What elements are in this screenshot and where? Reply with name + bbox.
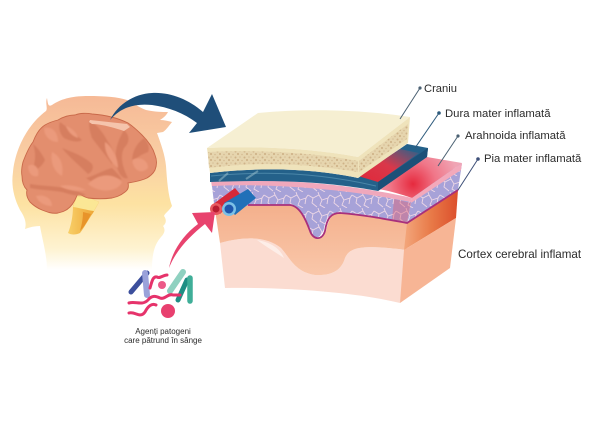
- brain stem: [68, 193, 99, 234]
- purple side: [407, 163, 462, 223]
- label: Arahnoida: Arahnoida inflamată: [465, 130, 566, 142]
- cranium front face: [207, 147, 358, 178]
- cortex side upper: [404, 190, 458, 250]
- arrow: pathogens entering blood: [169, 212, 215, 268]
- child head silhouette: [12, 96, 172, 270]
- cranium side face: [358, 117, 410, 178]
- cortex side lower: [400, 218, 456, 303]
- label: Craniu: [400, 83, 457, 119]
- cranium top face: [207, 110, 410, 157]
- label: Craniu: Craniu: [424, 83, 457, 95]
- cortex front lower: [220, 238, 407, 303]
- label: Pia mater: Pia mater inflamată: [484, 153, 582, 165]
- bacteria rods: [131, 273, 147, 292]
- arrow: from brain to tissue layers: [110, 93, 226, 133]
- label: Arahnoida: [438, 130, 566, 166]
- label: Dura mater: [415, 108, 551, 148]
- brain fold shadows: [30, 120, 149, 196]
- purple vein layer front: [212, 185, 411, 238]
- blood vessels: [210, 188, 256, 216]
- spongy bone side: [359, 124, 408, 172]
- pink strip front: [211, 180, 412, 203]
- label: Dura mater: Dura mater inflamată: [445, 108, 551, 120]
- pia top surface: [378, 157, 462, 198]
- blue vessel: [224, 189, 256, 215]
- label: Pia mater: [458, 153, 582, 190]
- arachnoid and pia layer: [205, 157, 462, 245]
- spongy bone front: [208, 151, 358, 172]
- red vessel: [212, 188, 240, 214]
- brain: [22, 113, 157, 213]
- pink squiggles: [150, 275, 167, 288]
- pathogens cluster: [129, 272, 190, 318]
- brain highlights: [28, 126, 148, 206]
- cortex tissue block: [215, 190, 458, 303]
- pia mater magenta line: [248, 190, 458, 238]
- virus spheres: [158, 281, 166, 289]
- cortex front upper band: [215, 205, 407, 275]
- pathogens caption: care pătrund în sânge: [124, 336, 202, 345]
- label: Cortex: Cortex cerebral inflamat: [458, 248, 582, 261]
- dura mater layer: [210, 144, 428, 191]
- cranium block: [207, 110, 410, 178]
- pathogens caption: Agenți patogeni: [135, 327, 191, 336]
